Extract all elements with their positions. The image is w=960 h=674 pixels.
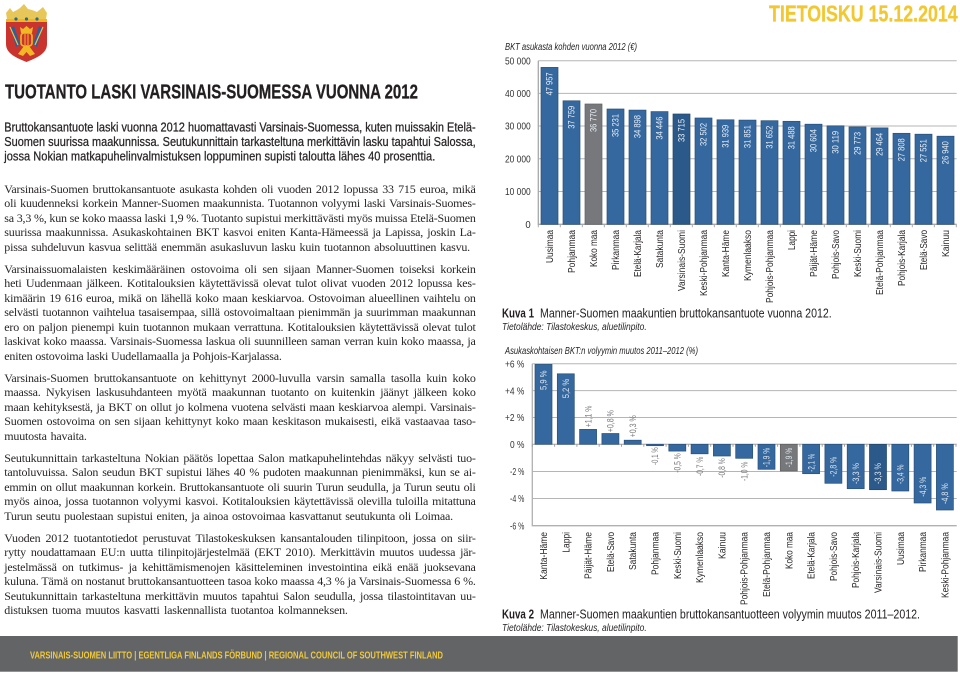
value labels: volume change: -2,1 %	[806, 454, 816, 472]
category labels: volume change: Pirkanmaa	[918, 532, 929, 572]
value labels: GDP per capita: 26 940	[940, 141, 950, 164]
chart title: GDP per capita: BKT asukasta kohden vuonna 2012 (€)	[505, 42, 637, 53]
text block: paragraph 4: myös ainoa, jossa tuotannon volyymi kasvoi. Kotitalouksien käytettävissä olevilla tuloilla mitattuna	[4, 494, 476, 508]
value labels: GDP per capita: 29 464	[874, 133, 884, 156]
category labels: GDP per capita: Pirkanmaa	[611, 230, 622, 270]
category labels: volume change: Kymenlaakso	[695, 532, 706, 583]
value labels: volume change: -2,8 %	[829, 457, 839, 477]
text block: paragraph 2: laskivat koko maassa. Varsinais-Suomessa laskua oli suunnilleen saman verran kuin koko maassa, ja	[4, 334, 476, 348]
value labels: GDP per capita: 30 119	[830, 131, 840, 154]
text block: paragraph 1: suurissa maakunnissa. Asukaskohtainen BKT kasvoi eniten Kanta-Hämeessä ja Lapissa, joskin La-	[4, 225, 476, 239]
category labels: GDP per capita: Koko maa	[589, 230, 600, 267]
y axis and grid: volume change: -2 %	[510, 467, 524, 478]
text block: paragraph 3	[4, 371, 476, 443]
caption: Kuva 2: Tietolähde: Tilastokeskus, aluetilinpito.	[502, 623, 647, 634]
category labels: GDP per capita: Pohjanmaa	[567, 230, 578, 273]
category labels: GDP per capita: Uusimaa	[545, 230, 556, 263]
category labels: GDP per capita: Etelä-Karjala	[633, 230, 644, 277]
text block: paragraph 2: eniten ostovoima laski Uudellamaalla ja Pohjois-Karjalassa.	[4, 349, 282, 363]
value labels: volume change: -3,4 %	[896, 464, 906, 484]
value labels: GDP per capita: 32 502	[698, 123, 708, 146]
text block: lead paragraph: Suomen suurissa maakunnissa. Seutukunnittain tarkasteltuna merkittävin lasku tapahtui Salossa,	[4, 135, 476, 149]
y axis and grid: volume change: 0 %	[510, 440, 524, 451]
value labels: GDP per capita: 31 851	[742, 125, 752, 148]
value labels: GDP per capita: 34 446	[654, 117, 664, 140]
text block: paragraph 1: sa 3,3 %, kun se koko maassa laski 1,9 %. Tuotanto supistui merkittävästi myös muissa Etelä-Suomen	[4, 211, 476, 225]
category labels: volume change: Varsinais-Suomi	[874, 532, 884, 593]
value labels: GDP per capita: 31 488	[786, 126, 796, 149]
value labels: GDP per capita: 27 808	[896, 138, 906, 161]
y axis and grid: volume change: +2 %	[505, 413, 524, 424]
y axis and grid: volume change: +4 %	[505, 386, 524, 397]
category labels: GDP per capita: Kymenlaakso	[743, 230, 754, 281]
text block: paragraph 2: ero on paljon pienempi kuin tuotannon mukaan verrattuna. Kotitalouksien käytettävissä olevat tulot	[4, 320, 476, 334]
category labels: GDP per capita: Keski-Suomi	[853, 230, 864, 277]
text block: paragraph 4	[4, 451, 476, 523]
caption: Kuva 1	[502, 306, 832, 333]
footer band: VARSINAIS-SUOMEN LIITTO | EGENTLIGA FINLANDS FÖRBUND | REGIONAL COUNCIL OF SOUTHWEST FINLAND	[30, 648, 443, 661]
value labels: GDP per capita: 29 773	[852, 132, 862, 155]
value labels: GDP per capita: 31 939	[720, 125, 730, 148]
value labels: GDP per capita: 30 604	[808, 129, 818, 152]
category labels: GDP per capita: Kainuu	[941, 230, 952, 257]
y axis and grid: GDP per capita: 40 000	[505, 89, 531, 100]
value labels: volume change: +1,1 %	[583, 405, 593, 427]
caption: Kuva 2: Kuva 2	[502, 607, 534, 621]
text block: paragraph 4: tantoluvuissa. Salon seudun BKT supistui lähes 40 % pudoten maakunnan pienimmäksi, kun se ai-	[4, 465, 476, 479]
value labels: volume change: -4,3 %	[918, 477, 928, 497]
y axis and grid: volume change: -6 %	[510, 521, 524, 532]
text block: paragraph 3: muutosta havaita.	[4, 429, 87, 443]
value labels: volume change: +0,8 %	[606, 410, 616, 432]
y axis and grid: volume change: -4 %	[510, 494, 524, 505]
value labels: volume change	[539, 370, 950, 504]
value labels: volume change: -0,1 %	[650, 447, 660, 465]
text block: paragraph 4: Seutukunnittain tarkasteltuna Nokian päätös lopettaa Salon matkapuhelintehdas näkyy selvästi tuo-	[4, 451, 476, 465]
value labels: GDP per capita: 36 770	[588, 109, 598, 132]
value labels: volume change: -0,5 %	[672, 453, 682, 473]
caption: Kuva 1: Kuva 1	[502, 306, 534, 320]
title: TUOTANTO LASKI VARSINAIS-SUOMESSA VUONNA 2012	[5, 81, 418, 104]
value labels: volume change: -0,8 %	[717, 458, 727, 478]
chart: GDP volume change 2011-2012	[504, 346, 957, 605]
value labels: GDP per capita: 31 652	[764, 126, 774, 149]
bars: volume change	[535, 364, 953, 510]
text block: paragraph 5: rytty noudattamaan EU:n uutta tilinpitojärjestelmää (EKT 2010). Merkittävin muutos uudessa jär-	[4, 545, 476, 559]
category labels: GDP per capita: Pohjois-Karjala	[897, 230, 908, 286]
category labels: volume change: Kainuu	[717, 532, 728, 559]
value labels: GDP per capita: 27 551	[918, 139, 928, 162]
text block: paragraph 3: maassa. Nykyisen laskusuhdanteen myötä maakunnan tuotanto on kuitenkin jäänyt jälkeen koko	[4, 385, 476, 399]
y axis and grid: GDP per capita: 0	[525, 220, 531, 231]
text block: lead paragraph: Bruttokansantuote laski vuonna 2012 huomattavasti Varsinais-Suomessa, kuten muissakin Etelä-	[4, 120, 476, 134]
category labels: GDP per capita: Lappi	[787, 230, 798, 250]
text block: paragraph 2: selvästi tuotannon vaihtelua tasaisempaa, sillä ostovoimaltaan pienimmän ja suurimman maakunnan	[4, 305, 476, 319]
value labels: volume change: -3,3 %	[851, 463, 861, 484]
category labels: GDP per capita: Kanta-Häme	[721, 230, 732, 277]
category labels: volume change: Pohjois-Karjala	[851, 532, 862, 588]
value labels: GDP per capita	[544, 72, 950, 164]
text block: paragraph 1: Varsinais-Suomen bruttokansantuote asukasta kohden oli vuoden 2012 lopussa 33 715 euroa, mikä	[4, 182, 476, 196]
y axis and grid: GDP per capita: 20 000	[505, 154, 531, 166]
text block: paragraph 1: oli kuudenneksi korkein Manner-Suomen maakunnista. Tuotannon volyymi laski Varsinais-Suomes-	[4, 196, 476, 210]
value labels: GDP per capita: 33 715	[676, 119, 686, 142]
category labels: volume change: Koko maa	[784, 532, 795, 569]
value labels: volume change: -4,8 %	[940, 483, 950, 504]
caption: Kuva 2	[502, 607, 920, 634]
category labels: volume change: Satakunta	[628, 532, 639, 570]
y axis and grid: GDP per capita: 50 000	[505, 56, 531, 67]
category labels: GDP per capita: Pohjois-Pohjanmaa	[765, 230, 776, 303]
value labels: GDP per capita: 37 759	[566, 106, 576, 129]
value labels: volume change: -3,3 %	[873, 463, 883, 484]
category labels: GDP per capita: Keski-Pohjanmaa	[699, 230, 710, 296]
text block: paragraph 4: Turun seutu puolestaan supistui eniten, ja ainoa ostovoimaa kasvattanut seutukunta oli Loimaa.	[4, 509, 453, 523]
text block: paragraph 5: jestelmässä on tutkimus- ja kehittämismenojen käsitteleminen investointina eikä enää juoksevana	[4, 560, 476, 574]
value labels: GDP per capita: 34 898	[632, 115, 642, 138]
text block: paragraph 3: Varsinais-Suomen bruttokansantuote on kehittynyt 2000-luvulla varsin samalla tasolla kuin koko	[4, 371, 476, 385]
text block: paragraph 1: pissa suhdeluvun kasvua selittää enemmän asukasluvun lasku kuin tuotannon absoluuttinen kasvu.	[4, 240, 470, 254]
category labels: GDP per capita: Etelä-Pohjanmaa	[875, 230, 886, 295]
category labels: volume change: Lappi	[561, 532, 572, 553]
caption: Kuva 1: Tietolähde: Tilastokeskus, aluetilinpito.	[502, 322, 647, 333]
value labels: volume change: -1,9 %	[784, 448, 794, 467]
text block: lead paragraph: jossa Nokian matkapuhelinvalmistuksen loppuminen supisti taloutta lähes 40 prosenttia.	[3, 150, 435, 164]
text block: paragraph 3: maan kehityksestä, ja BKT on ollut jo kolmena vuotena selvästi maan keskiarvoa alempi. Varsinais-	[4, 400, 476, 414]
value labels: GDP per capita: 47 957	[544, 72, 554, 95]
chart title: volume change: Asukaskohtaisen BKT:n volyymin muutos 2011–2012 (%)	[504, 346, 698, 357]
bars: GDP per capita	[541, 67, 954, 224]
category labels: GDP per capita: Satakunta	[655, 230, 666, 268]
category labels: GDP per capita: Etelä-Savo	[919, 230, 930, 270]
text block: paragraph 2: kimäärin 19 616 euroa, mikä on lähellä koko maan keskiarvoa. Ostovoiman alueellinen vaihtelu on	[4, 291, 476, 305]
value labels: volume change: +0,3 %	[628, 415, 638, 437]
value labels: volume change: 5,2 %	[561, 379, 571, 398]
text block: paragraph 5: Seutukunnittain tarkasteltuna merkittävin muutos tapahtui Salon seudulla, jossa tilastointitavan uu-	[4, 589, 476, 603]
category labels: volume change: Pohjois-Savo	[829, 532, 840, 581]
category labels: GDP per capita: Päijät-Häme	[809, 230, 820, 277]
text block: paragraph 3: Suomen ostovoima on sen sijaan kehittynyt koko maan keskitason mukaisesti, eikä vastaavaa taso-	[4, 414, 476, 428]
icon: coat of arms of Southwest Finland	[6, 4, 47, 62]
text block: paragraph 2	[4, 262, 476, 363]
category labels: GDP per capita	[545, 230, 952, 303]
text block: paragraph 5: kuluna. Tämä on nostanut bruttokansantuotteen tasoa koko maassa 4,3 % ja Varsinais-Suomessa 6 %.	[4, 574, 476, 588]
category labels: volume change	[539, 532, 951, 605]
value labels: volume change: -1,0 %	[739, 462, 749, 481]
value labels: volume change: -1,9 %	[762, 448, 772, 467]
y axis and grid: GDP per capita: 10 000	[505, 187, 531, 198]
category labels: volume change: Etelä-Karjala	[807, 532, 818, 579]
category labels: volume change: Pohjanmaa	[650, 532, 662, 575]
text block: paragraph 5: distuksen tuoma muutos kasvatti laskennallista tuotantoa kolmanneksen.	[4, 603, 348, 617]
caption: Kuva 1: Manner-Suomen maakuntien bruttokansantuote vuonna 2012.	[540, 306, 832, 320]
y axis and grid: volume change: +6 %	[505, 359, 524, 370]
category labels: volume change: Päijät-Häme	[584, 532, 595, 579]
category labels: volume change: Uusimaa	[896, 532, 907, 565]
value labels: volume change: -0,7 %	[695, 457, 705, 476]
chart: GDP per capita 2012	[505, 42, 957, 303]
value labels: GDP per capita: 35 231	[610, 114, 620, 137]
category labels: volume change: Pohjois-Pohjanmaa	[740, 532, 751, 605]
y axis and grid: GDP per capita	[505, 56, 957, 231]
category labels: volume change: Etelä-Pohjanmaa	[762, 532, 773, 597]
footer band	[0, 636, 958, 672]
text block: lead paragraph	[3, 120, 476, 164]
text block: paragraph 2: Varsinaissuomalaisten keskimääräinen ostovoima oli sen sijaan Manner-Suomen toiseksi korkein	[4, 262, 476, 276]
value labels: volume change: 5,9 %	[539, 370, 549, 390]
y axis and grid: GDP per capita: 30 000	[505, 122, 531, 133]
y axis and grid: volume change	[505, 359, 957, 532]
text block: paragraph 5	[4, 531, 476, 617]
text block: paragraph 4: emmin on ollut maakunnan korkein. Bruttokansantuote oli suurin Turun seudulla, ja Turun seutu oli	[4, 480, 476, 494]
category labels: GDP per capita: Varsinais-Suomi	[677, 230, 688, 291]
category labels: volume change: Keski-Suomi	[673, 532, 684, 579]
category labels: volume change: Etelä-Savo	[606, 532, 617, 572]
category labels: GDP per capita: Pohjois-Savo	[831, 230, 842, 279]
text block: paragraph 2: heti Uudenmaan jälkeen. Kotitalouksien käytettävissä olevat tulot olivat vuoden 2012 lopussa kes-	[4, 276, 476, 290]
text block: paragraph 5: Vuoden 2012 tuotantotiedot perustuvat Tilastokeskuksen kansantalouden tilinpitoon, jossa on siir-	[4, 531, 476, 545]
category labels: volume change: Kanta-Häme	[539, 532, 550, 580]
text block: paragraph 1	[4, 182, 476, 254]
category labels: volume change: Keski-Pohjanmaa	[940, 532, 951, 598]
